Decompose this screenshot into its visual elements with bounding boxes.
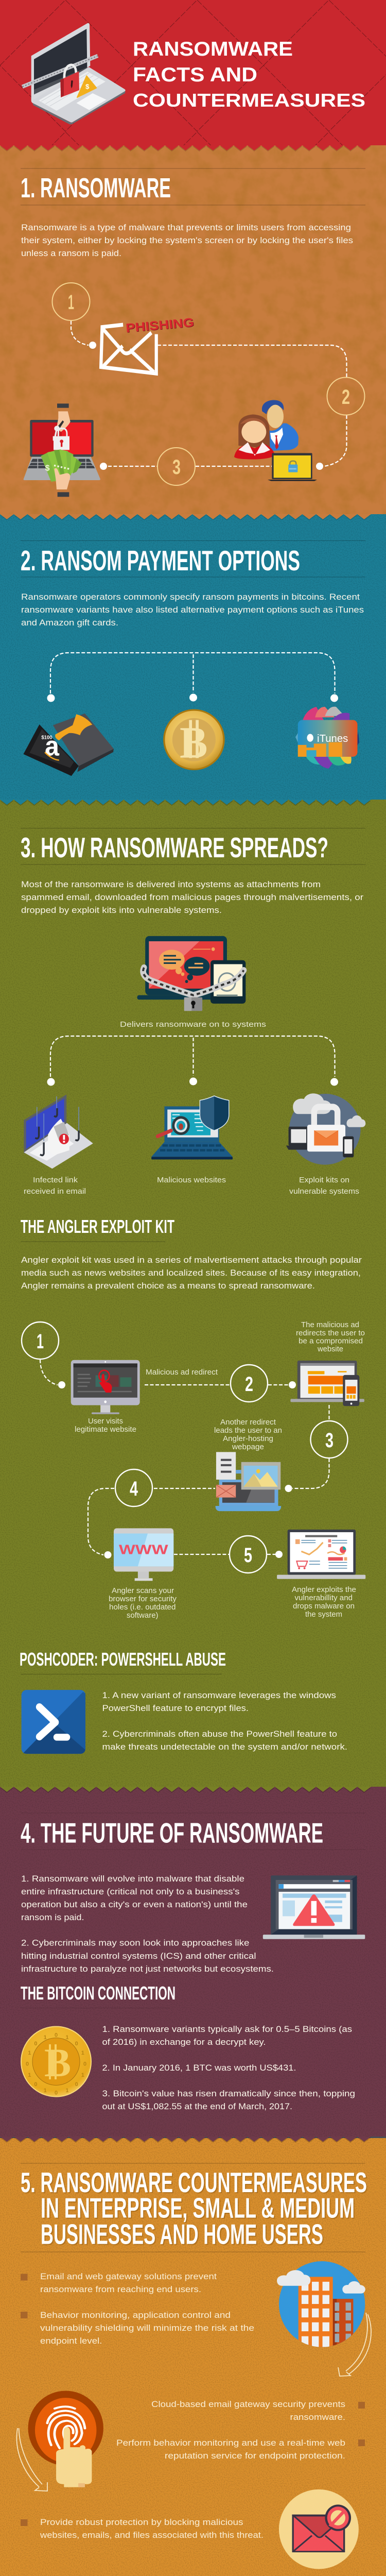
step 2 badge: 2	[342, 386, 350, 409]
caption: step 5 text: the system	[305, 1611, 342, 1619]
icon: phishing envelope	[101, 325, 156, 374]
label: phishing: PHISHING	[125, 315, 195, 335]
captions: delivery vectors: Exploit kits on	[299, 1176, 349, 1184]
caption: step 4 text	[109, 1587, 177, 1620]
captions: delivery vectors: vulnerable systems	[289, 1187, 359, 1196]
captions: delivery vectors: received in email	[24, 1187, 86, 1196]
caption: step 2 text: The malicious ad	[301, 1321, 359, 1329]
icon: angler hosting laptop	[216, 1452, 281, 1511]
bullet list: robust protection: websites, emails, and files associated with this threat.	[40, 2530, 264, 2540]
icon: itunes card	[295, 707, 359, 769]
text block: ransomware definition: Ransomware is a type of malware that prevents or limits users from accessing	[21, 223, 351, 232]
bullet list: cloud gateway and reputation: reputation service for endpoint protection.	[165, 2451, 345, 2461]
text block: powershell abuse: 2. Cybercriminals often abuse the PowerShell feature to	[102, 1729, 337, 1739]
captions: delivery vectors: Malicious websites	[157, 1176, 226, 1184]
text block: spreading intro: Most of the ransomware is delivered into systems as attachments from	[21, 879, 321, 889]
icon: chained laptop	[22, 23, 126, 124]
icon: fingerprint	[28, 2391, 103, 2487]
caption: step 3 text: leads the user to an	[214, 1427, 282, 1435]
step 4 badge	[115, 1469, 152, 1506]
text block: future predictions: 1. Ransomware will evolve into malware that disable	[21, 1874, 244, 1884]
bullet list: gateway and monitoring: Email and web gateway solutions prevent	[40, 2272, 217, 2281]
icon: blocked email	[279, 2489, 359, 2569]
step 5 badge	[230, 1536, 267, 1573]
caption: step 2 text: website	[317, 1345, 343, 1353]
text block: spreading intro: dropped by exploit kits into vulnerable systems.	[21, 905, 222, 915]
icon: monitor with click	[71, 1360, 140, 1414]
icon: powershell	[22, 1690, 85, 1754]
heading: the angler exploit kit: THE ANGLER EXPLOIT KIT	[21, 1216, 174, 1237]
icon: amazon gift card: a	[45, 731, 60, 762]
panel: 5 ransomware countermeasures	[0, 2138, 386, 2576]
caption: step 5 text: vulnerabillity and	[294, 1594, 353, 1602]
step 4 badge: 4	[130, 1478, 138, 1500]
text block: future predictions: ransom is paid.	[21, 1912, 84, 1922]
text block: bitcoin facts: 2. In January 2016, 1 BTC was worth US$431.	[102, 2063, 296, 2073]
icon: malicious website laptop	[151, 1096, 233, 1160]
heading: countermeasures	[21, 2166, 368, 2251]
panel: 4 future of ransomware	[0, 1785, 386, 2143]
icon: victim users with laptop	[234, 400, 317, 481]
step 1 badge	[52, 283, 90, 320]
step 3 badge	[157, 448, 195, 485]
caption: step 2 text: be a compromised	[299, 1337, 363, 1346]
caption: step 4 text: Angler scans your	[112, 1587, 174, 1595]
step 2 badge	[231, 1365, 268, 1402]
step 5 badge: 5	[244, 1544, 252, 1567]
step 2 badge: 2	[245, 1373, 253, 1396]
text block: angler intro	[21, 1255, 362, 1291]
icon: bitcoin	[163, 709, 225, 770]
bullet list: cloud gateway and reputation: Perform behavior monitoring and use a real-time web	[116, 2438, 345, 2448]
caption: step 1 text	[75, 1417, 136, 1434]
text block: bitcoin facts: 3. Bitcoin's value has risen dramatically since then, topping	[102, 2089, 355, 2098]
heading: the bitcoin connection: THE BITCOIN CONNECTION	[21, 1982, 176, 2004]
captions: delivery vectors: Infected link	[33, 1176, 78, 1184]
caption: step 4 text: browser for security	[109, 1595, 177, 1603]
panel: 1 ransomware	[0, 144, 386, 520]
icon: www monitor: WWW	[119, 1543, 169, 1557]
icon: bitcoin coin: 0101010101010101	[26, 2032, 86, 2096]
icon: cloud lock devices	[286, 1093, 365, 1165]
connector: delivery tree	[47, 1036, 338, 1086]
icon: chained laptop: $	[85, 83, 90, 91]
text block: future predictions: infrastructure to paralyze not just networks but ecosystems.	[21, 1964, 274, 1974]
step 2 badge	[327, 377, 364, 415]
icon: bitcoin: B	[180, 718, 207, 768]
heading: poshcoder powershell abuse: POSHCODER: POWERSHELL ABUSE	[20, 1649, 226, 1670]
caption: step 4 text: holes (i.e. outdated	[109, 1603, 176, 1612]
title	[133, 38, 365, 111]
text block: powershell abuse: 1. A new variant of ransomware leverages the windows	[102, 1690, 336, 1700]
step 1 badge: 1	[68, 291, 74, 314]
text block: bitcoin facts: of 2016) in exchange for a decrypt key.	[102, 2037, 266, 2047]
text block: payment intro: Ransomware operators commonly specify ransom payments in bitcoins. Recent	[21, 592, 360, 602]
panel: 2 ransom payment options	[0, 513, 386, 806]
text block: spreading intro	[21, 879, 363, 915]
text block: powershell abuse	[102, 1690, 347, 1752]
caption: step 1 text: User visits	[88, 1417, 123, 1426]
bullet list: robust protection	[21, 2517, 264, 2540]
icon: phishing laptop	[24, 1094, 93, 1168]
title: FACTS AND	[133, 64, 257, 86]
connector: angler flow	[40, 1360, 329, 1558]
icon: laptop warning	[263, 1875, 365, 1939]
icon: itunes card: iTunes	[317, 733, 348, 744]
step 3 badge	[311, 1421, 348, 1458]
text block: ransomware definition: unless a ransom is paid.	[21, 248, 121, 258]
caption: step 5 text: drops malware on	[293, 1602, 355, 1611]
text block: ransomware definition	[21, 223, 353, 258]
text block: ransomware definition: their system, either by locking the system's screen or by locking the user's files	[21, 235, 353, 245]
bullet list: gateway and monitoring: vulnerability shielding will minimize the risk at the	[40, 2323, 254, 2333]
text block: spreading intro: spammed email, downloaded from malicious pages through malvertisements, or	[21, 892, 363, 902]
bullet list: gateway and monitoring: endpoint level.	[40, 2336, 102, 2346]
icon: chained laptop and tablet	[137, 936, 245, 1011]
step 1 badge	[22, 1322, 59, 1359]
caption: step 3 text: Another redirect	[220, 1418, 276, 1427]
caption: step 5 text	[292, 1586, 356, 1619]
bullet list: gateway and monitoring: Behavior monitoring, application control and	[40, 2310, 231, 2320]
text block: future predictions: operation but also a city's or even a nation's) until the	[21, 1900, 248, 1909]
connector: payment tree	[47, 653, 338, 702]
text block: bitcoin facts	[102, 2024, 355, 2111]
title: RANSOMWARE	[133, 38, 293, 60]
caption: step 4 text: software)	[127, 1612, 159, 1620]
step 3 badge: 3	[325, 1429, 334, 1452]
step 3 badge: 3	[172, 456, 181, 479]
text block: bitcoin facts: 1. Ransomware variants typically ask for 0.5–5 Bitcoins (as	[102, 2024, 352, 2034]
step 1 badge: 1	[37, 1330, 44, 1353]
icon: office buildings	[277, 2261, 365, 2347]
text block: payment intro: and Amazon gift cards.	[21, 618, 118, 628]
label: malicious ad redirect: Malicious ad redirect	[146, 1368, 218, 1377]
label: phishing: PHISHING	[126, 316, 195, 336]
icon: bitcoin coin: B	[44, 2040, 71, 2085]
caption: step 2 text	[296, 1321, 365, 1353]
icon: ransom laptop with hands: $	[45, 464, 50, 472]
arrow: fingerprint to email	[16, 2428, 47, 2491]
bullet list: robust protection: Provide robust protection by blocking malicious	[40, 2517, 243, 2527]
text block: bitcoin facts: out at US$1,082.55 at the end of March, 2017.	[102, 2102, 292, 2111]
caption: step 3 text: webpage	[232, 1443, 264, 1451]
text block: future predictions	[21, 1874, 274, 1974]
text block: powershell abuse: make threats undetectable on the system and/or network.	[102, 1742, 347, 1752]
captions: delivery vectors	[24, 1176, 359, 1196]
bullet list: cloud gateway and reputation	[116, 2399, 365, 2461]
icon: amazon gift card: $100	[41, 735, 52, 741]
icon: laptop dashboard	[277, 1530, 365, 1579]
text block: powershell abuse: PowerShell feature to encrypt files.	[102, 1703, 249, 1713]
caption: delivers ransomware: Delivers ransomware on to systems	[120, 1020, 266, 1029]
arrow: building to fingerprint	[338, 2313, 371, 2376]
bullet list: cloud gateway and reputation: Cloud-based email gateway security prevents	[151, 2399, 345, 2409]
heading: ransomware: 1. RANSOMWARE	[21, 173, 171, 204]
text block: future predictions: 2. Cybercriminals may soon look into approaches like	[21, 1938, 249, 1947]
text block: angler intro: Angler exploit kit was used in a series of malvertisement attacks through popular	[21, 1255, 362, 1265]
bullet list: gateway and monitoring	[21, 2272, 254, 2346]
text block: future predictions: entire infrastructure (critical not only to a business's	[21, 1887, 240, 1896]
text block: payment intro	[21, 592, 364, 628]
bullet list: cloud gateway and reputation: ransomware.	[290, 2412, 345, 2422]
caption: step 3 text	[214, 1418, 282, 1451]
bullet list: gateway and monitoring: ransomware from reaching end users.	[40, 2284, 201, 2294]
icon: ransom laptop with hands	[24, 403, 100, 497]
panel: header	[0, 0, 386, 151]
icon: amazon gift card	[23, 714, 114, 776]
text block: future predictions: hitting industrial control systems (ICS) and other critical	[21, 1951, 256, 1961]
caption: step 3 text: Angler-hosting	[223, 1435, 273, 1443]
connector: ransomware cycle	[71, 321, 347, 470]
caption: step 5 text: Angler exploits the	[292, 1586, 356, 1594]
caption: step 1 text: legitimate website	[75, 1426, 136, 1434]
text block: angler intro: media such as news websites and localized sites. Because of its easy integration,	[21, 1268, 361, 1278]
title: COUNTERMEASURES	[133, 90, 365, 111]
text block: payment intro: ransomware variants have also listed alternative payment options such as iTunes	[21, 605, 364, 615]
icon: laptop and phone ad	[290, 1361, 364, 1406]
caption: step 2 text: redirects the user to	[296, 1329, 365, 1337]
text block: angler intro: Angler remains a prevalent choice as a means to spread ransomware.	[21, 1281, 315, 1291]
panel: 3 how ransomware spreads	[0, 799, 386, 1793]
icon: www monitor	[114, 1528, 173, 1581]
